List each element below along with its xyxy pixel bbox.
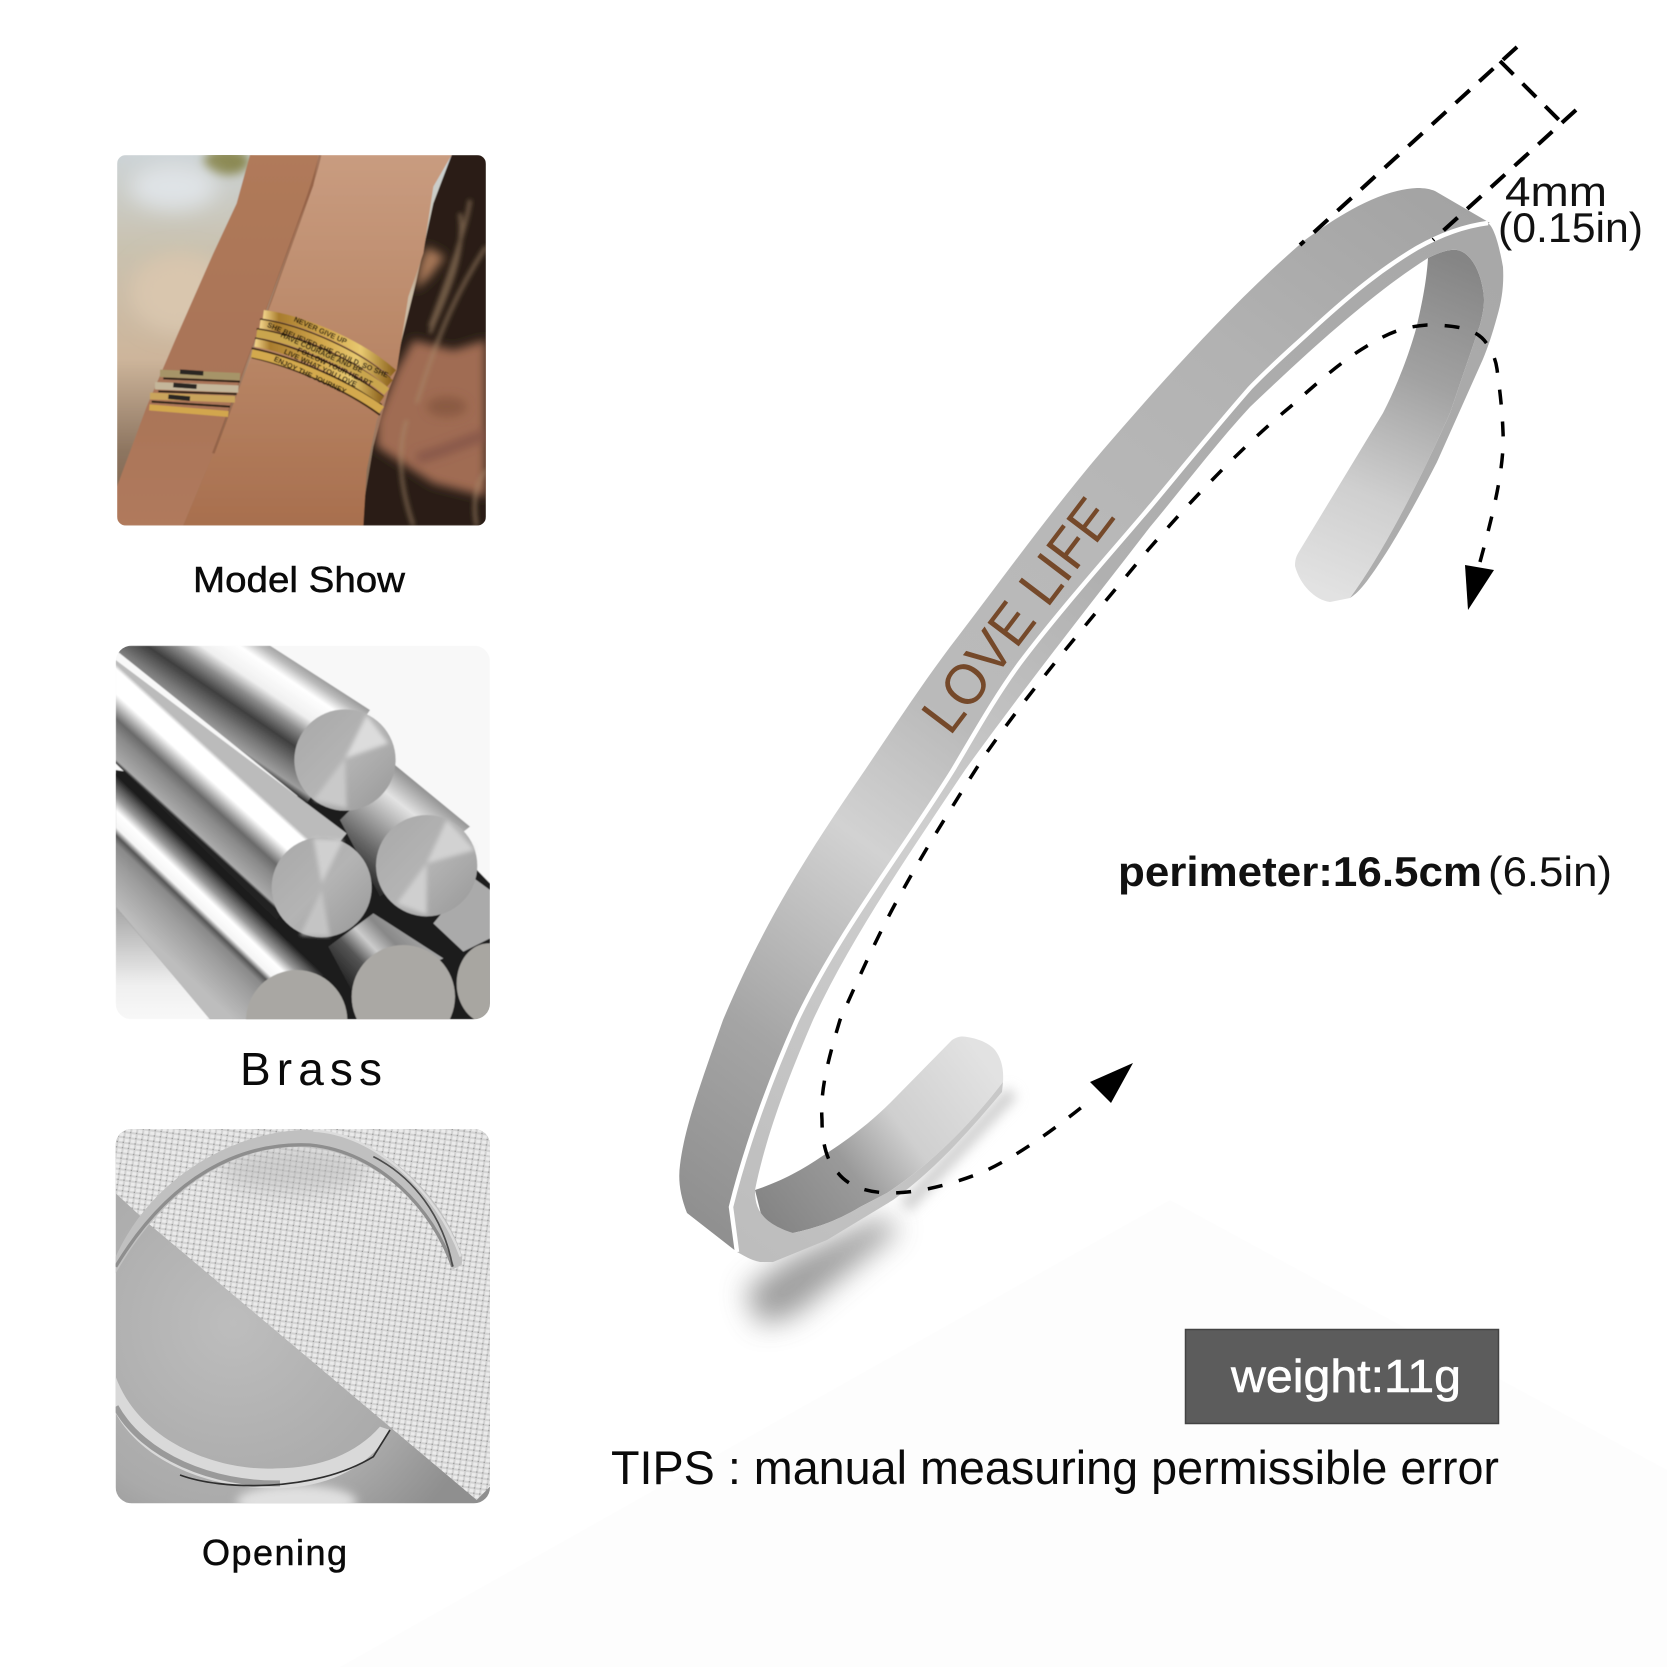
outer face [679,188,1490,1252]
width dimension lines: 4mm [1300,47,1576,245]
right wrist gold bangles with engraved words: ENJOY THE JOURNEY [272,354,348,396]
perimeter label: (6.5in) [1488,848,1612,895]
label: Brass: Brass [240,1043,382,1095]
panel: model show photo [117,148,486,526]
main bangle [679,188,1503,1262]
right wrist gold bangles with engraved words: NEVER GIVE UP [293,315,348,346]
faint background floor plane [340,1200,1667,1667]
white highlight line [731,223,1488,1252]
upper bangle arc [116,1130,462,1273]
arrowhead: lower end [1090,1063,1133,1103]
rim edge [731,223,1503,1262]
width label: (0.15in) [1498,204,1643,251]
panel: opening detail photo [116,1129,490,1518]
perimeter dashed arrow line [822,325,1503,1193]
right wrist gold bangles with engraved words: LIVE WHAT YOU LOVE [282,347,358,389]
right wrist gold bangles with engraved words: SHE BELIEVED SHE COULD, SO SHE [266,320,390,380]
front inner band [755,1036,1003,1233]
tips text: TIPS : manual measuring permissible error [611,1441,1499,1494]
arrowhead: right end [1465,565,1494,610]
lower bangle arc [116,1377,390,1488]
width label: 4mm [1505,168,1607,215]
left wrist bangles [149,372,240,414]
width label [1498,168,1643,251]
bangle cast shadow [745,1092,1012,1325]
right wrist gold bangles with engraved words: HAVE COURAGE AND BE [279,330,364,375]
right wrist gold bangles with engraved words [252,314,393,415]
label: Model Show: Model Show [193,559,406,600]
panel: metal rods photo [116,646,490,1020]
back inner band [1295,250,1484,602]
right wrist gold bangles with engraved words: FOLLOW YOUR HEART [296,345,375,388]
label: Opening: Opening [202,1532,347,1573]
perimeter label: perimeter:16.5cm [1118,848,1482,895]
engraved text: LOVE LIFE [909,486,1127,745]
weight badge: weight:11g [1230,1350,1461,1402]
rod end faces [246,709,520,1071]
weight badge [1186,1330,1498,1424]
